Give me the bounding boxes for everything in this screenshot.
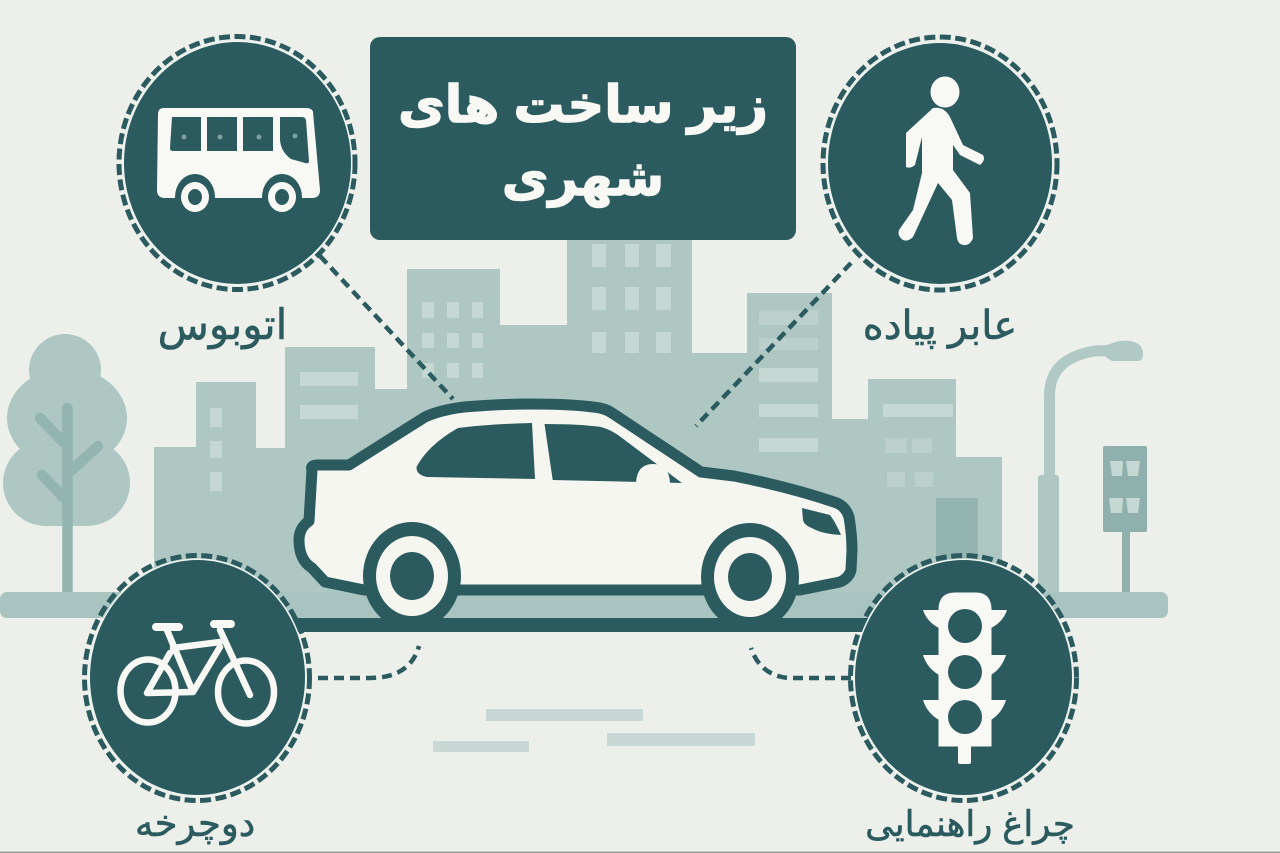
street lamp [1038,341,1143,597]
small traffic signal [1103,446,1147,595]
car windows [416,423,535,479]
title box: زیر ساخت های [398,76,768,135]
road line [290,618,880,632]
pedestrian badge [823,37,1057,290]
car [299,404,852,631]
rear wheel [701,523,799,631]
bicycle badge [84,556,310,800]
label: bicycle: دوچرخه [135,803,255,845]
label: pedestrian: عابر پیاده [863,304,1017,349]
label: bus: اتوبوس [158,301,287,349]
bus badge [119,36,355,290]
icon: bus [157,108,320,220]
road markings [433,709,755,752]
sidewalk band [0,592,1168,618]
label: traffic light: چراغ راهنمایی [865,804,1075,845]
title box [370,37,796,240]
title box: شهری [502,149,664,208]
traffic light badge [850,556,1076,800]
icon: bicycle [120,624,274,724]
icon: pedestrian [898,76,984,245]
connector dashed lines [318,256,851,678]
tree [3,334,130,592]
city skyline [154,235,1002,597]
icon: traffic light [923,593,1007,764]
front wheel [363,522,461,630]
headlight [802,508,841,535]
